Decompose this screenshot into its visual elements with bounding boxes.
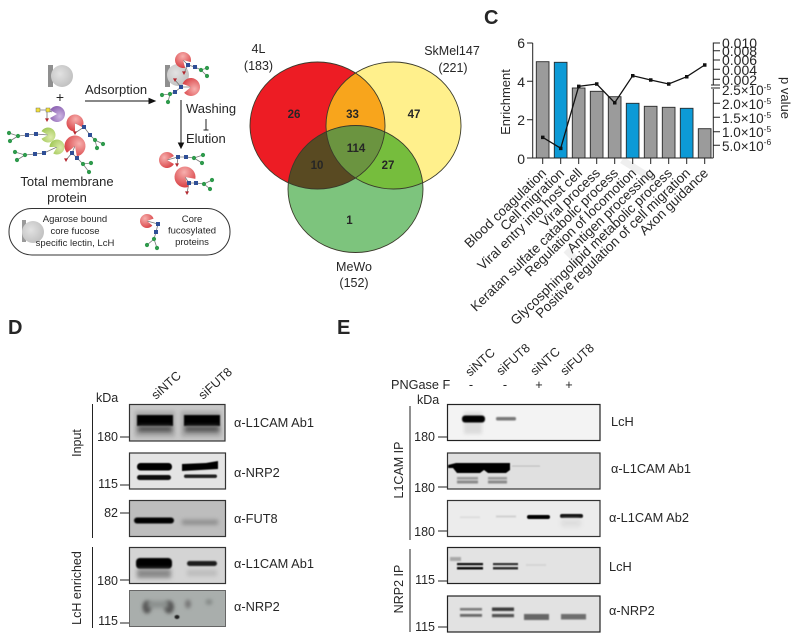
- molecular weight markers: 115: [415, 573, 435, 587]
- icon: legend lectin bead: [22, 220, 44, 243]
- PNGase F row: +: [535, 378, 543, 392]
- blot labels: α-FUT8: [234, 511, 278, 526]
- category labels: Positive regulation of cell migration: [533, 165, 693, 321]
- right axis upper tick labels: 0.006: [722, 52, 757, 68]
- molecular weight markers: 180: [414, 430, 435, 444]
- PNGase F row: -: [503, 378, 507, 392]
- blot: NRP2 NRP2 IP: [448, 596, 600, 632]
- right axis lower tick labels: -5: [764, 82, 772, 92]
- arrow: washing and elution: [178, 100, 184, 148]
- right axis upper tick labels: 0.010: [722, 35, 757, 51]
- molecular weight markers: 115: [415, 620, 435, 634]
- blot: LcH L1CAM IP: [448, 404, 600, 440]
- molecular weight markers: [414, 430, 435, 634]
- group label: Input: Input: [70, 429, 84, 457]
- lane labels: siNTC: [463, 346, 498, 379]
- p value line series: [541, 63, 706, 150]
- right axis lower tick labels: -6: [764, 137, 772, 147]
- legend text: lectin: specific lectin, LcH: [36, 238, 114, 249]
- molecular weight markers: [97, 430, 118, 628]
- molecular weight markers: 115: [98, 477, 118, 491]
- lane labels: siNTC: [149, 369, 184, 402]
- molecular weight markers: 180: [97, 574, 118, 588]
- icon: agarose bound lectin bead: [48, 65, 73, 87]
- panel label C: C: [484, 7, 498, 29]
- blot: LcH NRP2 IP: [448, 548, 600, 584]
- Venn circles: [250, 62, 461, 252]
- PNGase F row: -: [469, 378, 473, 392]
- legend box: [9, 208, 230, 255]
- label: total membrane protein: protein: [47, 190, 87, 205]
- group label: NRP2 IP: NRP2 IP: [392, 565, 406, 613]
- blot: NRP2 LcH enriched: [130, 590, 226, 626]
- panel A: lectin adsorption workflow: [7, 49, 236, 255]
- blot labels: LcH: [609, 559, 632, 574]
- legend text: lectin: Agarose bound: [43, 214, 107, 225]
- plus sign: +: [56, 89, 64, 105]
- right axis upper tick labels: 0.008: [722, 43, 757, 59]
- molecular weight markers: 82: [104, 506, 118, 520]
- lane labels: [149, 365, 235, 402]
- category labels: Blood coagulation: [461, 165, 549, 251]
- legend text: fucosylated proteins: fucosylated: [168, 226, 216, 236]
- label: total membrane protein: Total membrane: [20, 174, 114, 189]
- label: SkMel147: (221): [438, 61, 468, 75]
- right axis lower tick labels: -5: [764, 110, 772, 120]
- blot labels: [234, 415, 314, 614]
- Venn region counts: 1: [346, 215, 353, 227]
- PNGase F row: PNGase F: [391, 378, 450, 392]
- molecular weight markers: 180: [414, 525, 435, 539]
- panel label E: E: [337, 317, 350, 339]
- lane labels: siFUT8: [494, 341, 533, 378]
- right axis lower tick labels: 2.0×10: [722, 97, 764, 112]
- inhibition mark between washing and elution: [204, 119, 208, 130]
- axes and ticks: [527, 43, 720, 164]
- right axis upper tick labels: [722, 35, 757, 88]
- right axis lower tick labels: -5: [764, 96, 772, 106]
- label: 4L: 4L: [252, 42, 265, 56]
- group brackets: [92, 404, 94, 628]
- category labels: Cell migration: [497, 165, 567, 233]
- left axis tick labels: 2: [517, 112, 525, 128]
- panel C: enrichment bar chart: [461, 35, 793, 328]
- legend text: lectin: core fucose: [50, 226, 100, 237]
- icon: total membrane protein mix: [7, 106, 105, 174]
- blot: L1CAM Ab1 L1CAM IP: [448, 453, 600, 489]
- blot labels: α-NRP2: [234, 465, 280, 480]
- right axis lower tick labels: 1.0×10: [722, 125, 764, 140]
- PNGase F row: [391, 378, 573, 392]
- bars: [536, 62, 711, 158]
- molecular weight markers: 180: [97, 430, 118, 444]
- category labels: Regulation of locomotion: [522, 165, 639, 279]
- blot: NRP2 input: [130, 453, 226, 489]
- panel D: western blots: [70, 365, 314, 628]
- blot: L1CAM Ab1 input: [130, 404, 225, 441]
- Venn region counts: 27: [382, 160, 394, 172]
- group label: LcH enriched: LcH enriched: [70, 551, 84, 625]
- lane labels: siFUT8: [558, 341, 597, 378]
- blot labels: [609, 414, 691, 618]
- panel label D: D: [8, 317, 22, 339]
- blot labels: α-L1CAM Ab1: [611, 461, 691, 476]
- marker ticks: [438, 437, 447, 627]
- panel B: Venn diagram: [244, 42, 480, 290]
- category labels: Viral process: [537, 165, 603, 230]
- label: washing: Washing: [186, 101, 236, 116]
- panel E: western blots: [391, 341, 691, 634]
- left axis tick labels: [517, 35, 525, 167]
- blot: L1CAM Ab1 LcH enriched: [130, 548, 226, 584]
- kDa label: kDa: [96, 391, 118, 405]
- blot: FUT8 input: [130, 500, 226, 536]
- category labels: Axon guidance: [636, 165, 711, 238]
- icon: eluted core fucosylated proteins: [159, 152, 214, 195]
- label: MeWo: MeWo: [336, 260, 372, 274]
- right axis lower tick labels: [722, 82, 772, 154]
- right axis lower tick labels: 5.0×10: [722, 139, 764, 154]
- lane labels: [463, 341, 597, 379]
- icon: legend fucosylated protein: [139, 213, 160, 250]
- blot labels: LcH: [611, 414, 634, 429]
- Venn region counts: 26: [288, 109, 300, 121]
- blot labels: α-NRP2: [234, 599, 280, 614]
- right axis lower tick labels: 1.5×10: [722, 111, 764, 126]
- icon: bead with bound core fucosylated proteins: [160, 49, 209, 104]
- kDa label: kDa: [417, 393, 439, 407]
- category labels: Viral entry into host cell: [474, 165, 585, 273]
- legend text: fucosylated proteins: proteins: [175, 237, 209, 248]
- category labels: Glycosphingolipid metabolic process: [508, 165, 675, 328]
- PNGase F row: +: [565, 378, 573, 392]
- Venn region counts: 10: [311, 160, 323, 172]
- left axis tick labels: 4: [517, 74, 525, 90]
- group label: L1CAM IP: L1CAM IP: [392, 442, 406, 498]
- blot labels: α-L1CAM Ab1: [234, 415, 314, 430]
- Venn region counts: 47: [408, 109, 420, 121]
- category labels: Keratan sulfate catabolic process: [468, 165, 621, 314]
- blot labels: α-L1CAM Ab2: [609, 510, 689, 525]
- right axis upper tick labels: 0.004: [722, 62, 757, 78]
- molecular weight markers: 115: [98, 614, 118, 628]
- marker ticks: [120, 437, 129, 623]
- Venn region counts: [288, 109, 420, 227]
- legend text: fucosylated proteins: Core: [182, 214, 202, 225]
- left axis tick labels: 0: [517, 151, 525, 167]
- blot labels: α-NRP2: [609, 603, 655, 618]
- label: 4L: (183): [244, 59, 273, 73]
- category labels: Antigen processing: [564, 165, 657, 256]
- category labels: [461, 165, 711, 328]
- label: elution: Elution: [186, 131, 226, 146]
- right axis lower tick labels: 2.5×10: [722, 83, 764, 98]
- right axis upper tick labels: 0.002: [722, 72, 757, 88]
- label: SkMel147: SkMel147: [424, 44, 480, 58]
- blot: L1CAM Ab2 L1CAM IP: [448, 500, 600, 536]
- molecular weight markers: 180: [414, 481, 435, 495]
- lane labels: siNTC: [528, 345, 563, 378]
- arrow: adsorption: [85, 98, 155, 104]
- group brackets: [409, 406, 411, 632]
- right axis lower tick labels: -5: [764, 124, 772, 134]
- left axis title: Enrichment: [498, 69, 513, 135]
- lane labels: siFUT8: [196, 365, 235, 402]
- label: MeWo: (152): [339, 276, 369, 290]
- left axis tick labels: 6: [517, 35, 525, 51]
- blot labels: α-L1CAM Ab1: [234, 556, 314, 571]
- Venn region counts: 114: [347, 143, 366, 155]
- label: adsorption: Adsorption: [85, 82, 147, 97]
- Venn region counts: 33: [346, 109, 359, 121]
- right axis title: p value: [778, 77, 793, 119]
